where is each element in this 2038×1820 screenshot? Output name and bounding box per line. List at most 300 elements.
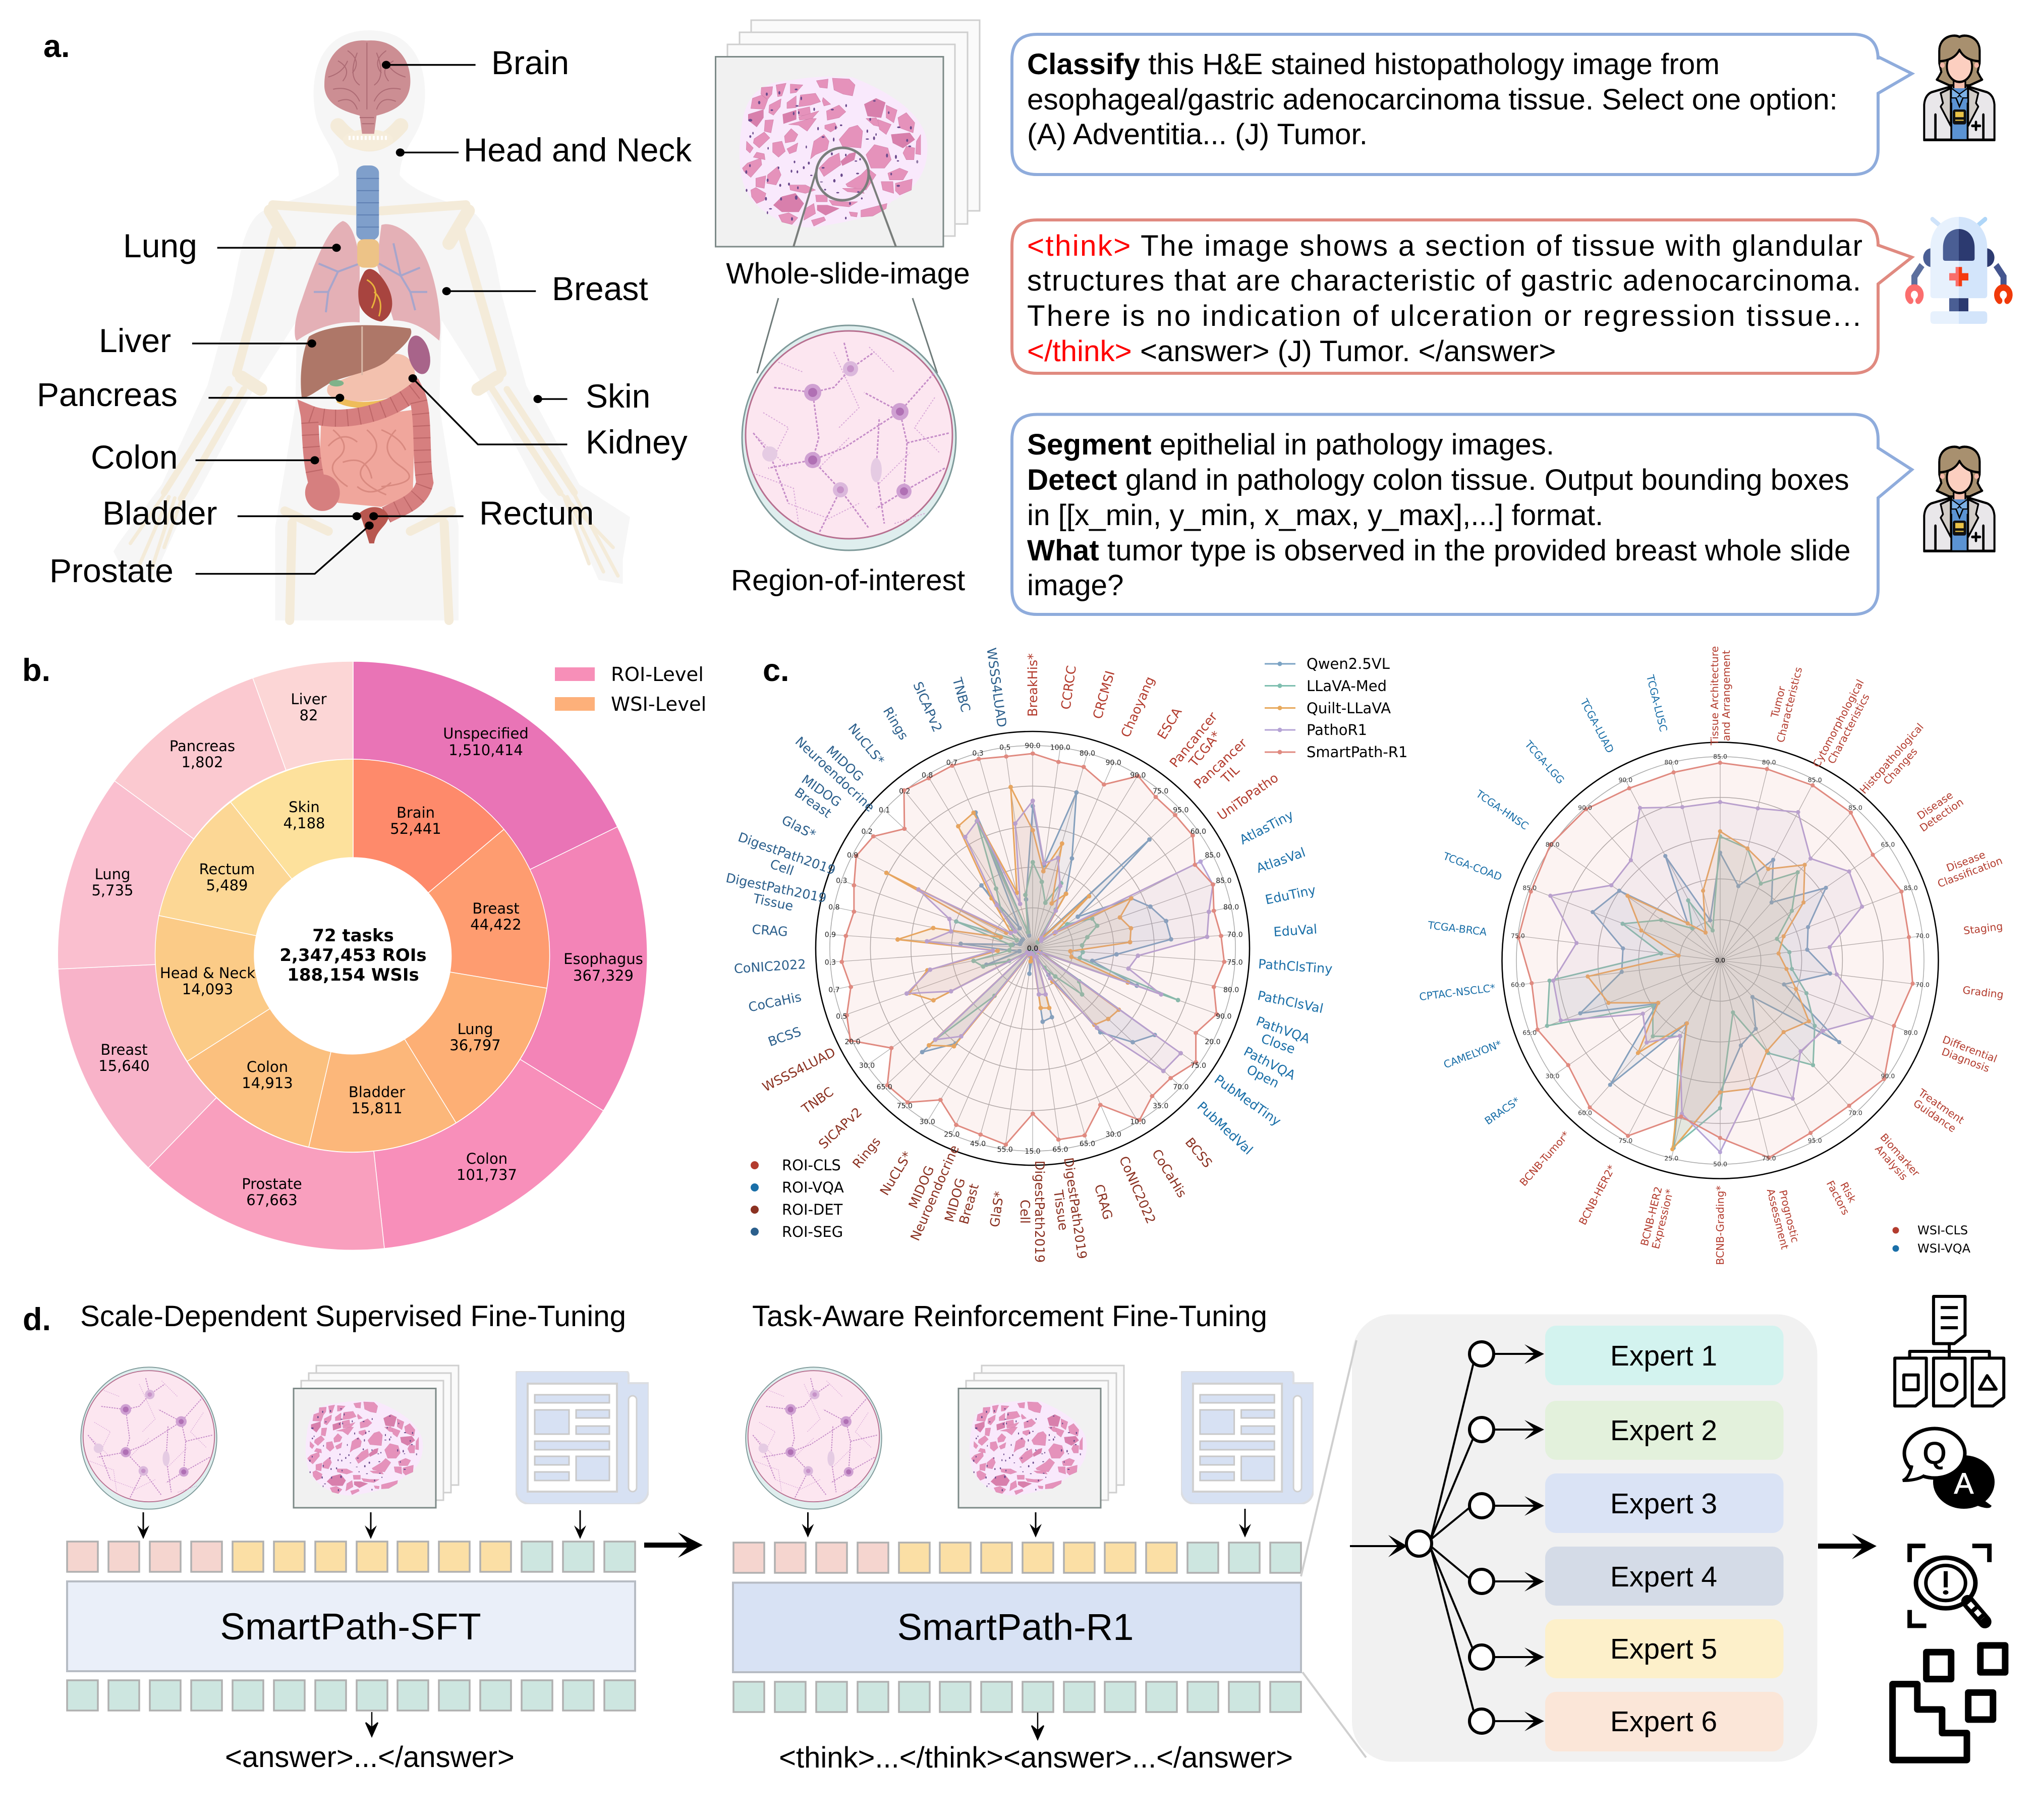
- sunburst labels: 15,811: [351, 1100, 403, 1117]
- radial tick values: 70.0: [1227, 931, 1243, 939]
- sunburst labels: Colon: [466, 1150, 507, 1167]
- speech bubble: user segmentation, detection and subtyping prompts: in [[x_min, y_min, x_max, y_max],...] format.: [1027, 499, 1603, 532]
- series: inner models: [886, 787, 1213, 1071]
- radar axis labels: Tissue: [1050, 1188, 1071, 1231]
- sunburst labels: 15,640: [98, 1057, 150, 1074]
- model legend: Qwen2.5VL: [1307, 655, 1390, 672]
- model box: SmartPath-SFT: [67, 1581, 635, 1671]
- radial tick values: 90.0: [1130, 772, 1146, 780]
- radial tick values: [825, 742, 1243, 1156]
- organ labels: Brain: [491, 44, 569, 81]
- radar axis labels: CRCMSI: [1090, 669, 1118, 721]
- organ labels: Colon: [91, 438, 178, 476]
- radial tick values: 85.0: [1216, 877, 1231, 885]
- radar axis labels: Cytomorphological: [1810, 677, 1866, 769]
- radar axis labels: DigestPath2019: [736, 830, 837, 878]
- radar axis labels: BCNB-Grading*: [1714, 1185, 1726, 1265]
- stage 1 output tokens: [67, 1680, 635, 1711]
- radial tick values: 50.0: [1713, 1160, 1727, 1168]
- radar axis labels: TCGA-LUAD: [1578, 697, 1616, 755]
- icon: question and answer bubbles: A: [1954, 1467, 1974, 1500]
- organ labels: Pancreas: [37, 376, 178, 413]
- radial tick values: 15.0: [1025, 1148, 1041, 1156]
- sunburst labels: [91, 691, 643, 1209]
- radar axis labels: UniToPatho: [1215, 770, 1281, 824]
- organ labels: Bladder: [102, 494, 217, 532]
- radial tick values: 0.7: [946, 759, 957, 767]
- sunburst labels: 1,510,414: [448, 742, 523, 759]
- radar axis labels: TNBC: [949, 675, 973, 714]
- radar axis labels: Characteristics: [1825, 692, 1872, 766]
- branch arrowheads: [1388, 1344, 1544, 1731]
- radar axis labels: CoNIC2022: [1116, 1154, 1158, 1226]
- WSI stack: [715, 20, 980, 247]
- expert 3: [1545, 1473, 1784, 1533]
- radial tick values: 85.0: [1808, 776, 1822, 783]
- sunburst labels: 367,329: [573, 967, 634, 984]
- human body illustration: [114, 30, 630, 620]
- radial tick values: 10.0: [1130, 1118, 1146, 1126]
- radar axis labels: BRACS*: [1483, 1095, 1522, 1127]
- arrow: stage 1 to stage 2: [644, 1532, 703, 1558]
- sunburst labels: 82: [300, 707, 318, 724]
- sunburst labels: 14,093: [182, 981, 233, 998]
- sunburst labels: Brain: [397, 804, 435, 821]
- center totals: 188,154 WSIs: [287, 965, 419, 985]
- radar axis labels: Diagnosis: [1940, 1046, 1991, 1074]
- radar axis labels: Neuroendocrine: [908, 1143, 963, 1243]
- radial tick values: 90.0: [1025, 742, 1041, 750]
- radar axis labels: CoCaHis: [1149, 1147, 1190, 1201]
- radar axis labels: WSSS4LUAD: [760, 1045, 838, 1095]
- stage 2 output text: <think>...</think><answer>...</answer>: [779, 1741, 1293, 1774]
- legend: [555, 663, 706, 716]
- organ labels: Breast: [552, 270, 648, 307]
- radar axis labels: MIDOG: [799, 772, 844, 810]
- sunburst labels: Pancreas: [169, 737, 235, 755]
- radar axis labels: MIDOG: [823, 743, 866, 785]
- radial tick values: 0.0: [1027, 945, 1038, 953]
- speech bubble: model reasoning response: structures that are characteristic of gastric adenocarcinoma.: [1027, 264, 1861, 297]
- organ labels: Kidney: [586, 423, 688, 461]
- radar axis labels: PathClsVal: [1256, 988, 1325, 1016]
- radial tick values: 70.0: [1173, 1083, 1188, 1091]
- radar axis labels: CPTAC-NSCLC*: [1419, 982, 1496, 1003]
- radial tick values: 80.0: [1080, 750, 1095, 758]
- radar axis labels: AtlasTiny: [1237, 808, 1296, 848]
- radar axis labels: Classification: [1936, 855, 2004, 890]
- speech bubble: user segmentation, detection and subtyping prompts: Detect gland in pathology colon tissue. Output bounding boxes: [1027, 464, 1849, 496]
- radar axis labels: Staging: [1963, 920, 2004, 937]
- radar axis labels: Chaoyang: [1118, 674, 1158, 740]
- radar axis labels: DigestPath2019: [724, 871, 828, 906]
- radar axis labels: EduTiny: [1264, 883, 1317, 908]
- model box: SmartPath-SFT: SmartPath-SFT: [220, 1606, 481, 1647]
- arrow: experts to task outputs: [1818, 1533, 1877, 1559]
- sunburst labels: Esophagus: [563, 950, 643, 968]
- sunburst labels: Breast: [100, 1041, 148, 1058]
- radial tick values: 85.0: [1205, 851, 1221, 860]
- radial tick values: 30.0: [1106, 1131, 1121, 1139]
- radial tick values: 30.0: [1546, 1072, 1559, 1080]
- radial tick values: 90.0: [1106, 759, 1121, 767]
- ROI task legend: ROI-VQA: [782, 1179, 844, 1196]
- radial tick values: 0.5: [836, 1013, 847, 1021]
- WSI task legend: WSI-CLS: [1917, 1223, 1968, 1237]
- radar axis labels: Risk: [1838, 1180, 1858, 1205]
- organ labels: Prostate: [49, 552, 174, 589]
- zoom lines to ROI: [757, 298, 937, 373]
- speech bubble: user classification prompt: esophageal/gastric adenocarcinoma tissue. Select one option:: [1027, 83, 1838, 116]
- sunburst labels: Bladder: [349, 1084, 405, 1101]
- radar axis labels: TCGA-LGG: [1522, 738, 1567, 786]
- stage 2 output arrow: [1032, 1713, 1044, 1739]
- model legend: PathoR1: [1307, 721, 1367, 738]
- stage 1 input arrows: [143, 1510, 580, 1533]
- document icon: [516, 1371, 649, 1504]
- radar axis labels: BCNB-Tumor*: [1517, 1129, 1572, 1188]
- radar axis labels: [1419, 646, 2004, 1265]
- radial tick values: 90.0: [1618, 776, 1632, 783]
- heading: supervised fine-tuning: Scale-Dependent Supervised Fine-Tuning: [80, 1300, 626, 1333]
- radial tick values: 30.0: [859, 1062, 875, 1070]
- document icon: [1181, 1371, 1314, 1504]
- radial tick values: 45.0: [970, 1140, 986, 1148]
- sunburst labels: Prostate: [242, 1175, 302, 1192]
- model box: SmartPath-R1: [733, 1583, 1301, 1672]
- radar axis labels: Characteristics: [1774, 666, 1804, 744]
- radar axis labels: [721, 647, 1333, 1263]
- speech bubble: model reasoning response: </think> <answer> (J) Tumor. </answer>: [1027, 335, 1556, 368]
- radar axis labels: CRAG: [752, 922, 788, 940]
- radial tick values: 95.0: [1173, 807, 1188, 815]
- radar axis labels: BCSS: [1182, 1135, 1215, 1171]
- radar axis labels: EduVal: [1273, 922, 1318, 940]
- speech bubble: user classification prompt: [1012, 34, 1912, 175]
- outer ring: ROI-level: [58, 661, 647, 1250]
- speech bubble: model reasoning response: There is no indication of ulceration or regression tissue...: [1027, 300, 1861, 332]
- organ labels: Lung: [123, 227, 197, 264]
- radar axis labels: Open: [1244, 1062, 1281, 1091]
- radar axis labels: Rings: [880, 705, 911, 743]
- sunburst labels: Lung: [458, 1020, 493, 1038]
- sunburst labels: 4,188: [283, 815, 325, 832]
- inner ring: WSI-level: [155, 759, 549, 1152]
- radar axis labels: TCGA-LUSC: [1644, 673, 1670, 733]
- sunburst labels: Lung: [95, 866, 130, 883]
- ROI task legend: ROI-SEG: [782, 1223, 843, 1240]
- sunburst labels: Head & Neck: [160, 964, 255, 982]
- radial tick values: 75.0: [1153, 787, 1168, 795]
- radar axis labels: Tissue Architecture: [1709, 646, 1721, 746]
- radar axis labels: Analysis: [1873, 1143, 1910, 1182]
- radar axis labels: Breast: [791, 785, 834, 821]
- radar axis labels: Neuroendocrine: [792, 734, 877, 815]
- radar axis labels: Close: [1259, 1031, 1297, 1057]
- radar axis labels: DigestPath2019: [1032, 1161, 1047, 1263]
- radial tick values: 30.0: [920, 1118, 935, 1126]
- radial tick values: 0.5: [999, 744, 1010, 752]
- stage 2 arrowheads: [802, 1524, 1251, 1538]
- radar axis labels: NuCLS*: [877, 1149, 915, 1198]
- WSI task legend: [1893, 1223, 1971, 1256]
- radial tick values: 0.3: [972, 750, 984, 758]
- center totals: 2,347,453 ROIs: [279, 945, 427, 965]
- radar axis labels: Cell: [768, 857, 796, 879]
- stage 1 input tokens: [67, 1542, 635, 1572]
- radial tick values: 80.0: [1664, 759, 1678, 766]
- organ labels: Rectum: [479, 494, 594, 532]
- radar axis labels: BreakHis*: [1026, 653, 1041, 717]
- radar axis labels: CAMELYON*: [1442, 1038, 1503, 1071]
- radar axis labels: TCGA-HNSC: [1474, 787, 1531, 832]
- radar axis labels: AtlasVal: [1254, 845, 1308, 876]
- radar axis labels: PathClsTiny: [1258, 957, 1333, 977]
- expert 2: [1545, 1401, 1784, 1460]
- radar axis labels: Histopathological: [1857, 721, 1926, 796]
- radial tick values: 75.0: [1762, 1154, 1776, 1162]
- radar axis labels: Treatment: [1916, 1086, 1966, 1126]
- model box: SmartPath-R1: SmartPath-R1: [897, 1606, 1134, 1648]
- callout leader lines: [192, 61, 567, 574]
- ROI image: [81, 1367, 217, 1509]
- speech bubble: user segmentation, detection and subtyping prompts: [1012, 415, 1912, 614]
- radial tick values: 80.0: [1904, 1029, 1918, 1036]
- sunburst labels: 14,913: [242, 1074, 293, 1092]
- model legend: LLaVA-Med: [1307, 677, 1387, 695]
- center totals: 72 tasks: [312, 926, 394, 946]
- radial tick values: 60.0: [1191, 828, 1206, 836]
- panel label a: a.: [43, 29, 70, 64]
- sunburst labels: Rectum: [199, 861, 255, 878]
- radar axis labels: Guidance: [1911, 1097, 1958, 1135]
- WSI stack: [958, 1366, 1124, 1508]
- stage 1 output text: <answer>...</answer>: [225, 1741, 515, 1774]
- icon: doctor 1: [1924, 36, 1995, 140]
- sunburst labels: Breast: [472, 900, 520, 917]
- radial tick values: 0.7: [828, 986, 840, 994]
- radial tick values: 70.0: [1915, 981, 1930, 989]
- radial tick values: 65.0: [1522, 1029, 1537, 1036]
- radar axis labels: ESCA: [1155, 705, 1185, 742]
- radar axis labels: Cell: [1017, 1200, 1032, 1224]
- radial tick values: 0.9: [825, 931, 836, 939]
- stage 1 arrowheads: [137, 1525, 586, 1539]
- ROI task legend: [751, 1157, 844, 1240]
- radar axis labels: Assessment: [1765, 1187, 1791, 1250]
- expert 4: [1545, 1547, 1784, 1606]
- expert 1: [1545, 1326, 1784, 1385]
- radar axis labels: TCGA*: [1186, 728, 1224, 770]
- icon: segmentation masks: [1893, 1645, 2005, 1760]
- expert routing panel: [1301, 1315, 1817, 1761]
- radial tick values: 75.0: [897, 1102, 913, 1110]
- radial tick values: 0.2: [861, 828, 873, 836]
- radar axis labels: CRAG: [1091, 1183, 1115, 1221]
- radial tick values: 65.0: [1881, 840, 1895, 848]
- radar axis labels: Disease: [1945, 848, 1987, 874]
- radial tick values: 0.3: [825, 958, 836, 966]
- sunburst labels: 52,441: [390, 820, 441, 837]
- radar axis labels: GlaS*: [987, 1190, 1007, 1228]
- radial tick values: 90.0: [1578, 804, 1592, 812]
- radial tick values: 0.2: [899, 787, 910, 795]
- radial tick values: 85.0: [1713, 753, 1727, 760]
- radial tick values: 90.0: [1216, 1013, 1231, 1021]
- sunburst labels: 36,797: [449, 1037, 501, 1054]
- stage 2 input tokens: [733, 1543, 1301, 1573]
- icon: doctor 2: [1924, 447, 1995, 551]
- radial tick values: 0.0: [1715, 956, 1725, 964]
- icon: detection magnifier: [1910, 1546, 1990, 1626]
- expert 1: Expert 1: [1610, 1340, 1717, 1372]
- ROI dish: [742, 325, 956, 550]
- sunburst labels: 1,802: [181, 754, 223, 771]
- radar grid: [816, 731, 1250, 1165]
- radial tick values: 25.0: [1664, 1154, 1678, 1162]
- radial tick values: [1511, 753, 1930, 1168]
- radial tick values: 80.0: [1223, 903, 1239, 912]
- radar axis labels: Pancancer: [1167, 709, 1221, 771]
- radar axis labels: DigestPath2019: [1060, 1157, 1090, 1260]
- model legend: SmartPath-R1: [1307, 744, 1407, 761]
- radar axis labels: Differential: [1941, 1033, 1999, 1065]
- radial tick values: 80.0: [1223, 986, 1239, 994]
- radar grid: [1502, 743, 1938, 1178]
- sunburst labels: 5,735: [91, 882, 134, 899]
- radial tick values: 0.1: [879, 807, 890, 815]
- radar axis labels: TNBC: [799, 1085, 836, 1117]
- radial tick values: 65.0: [877, 1083, 892, 1091]
- radial tick values: 70.0: [1848, 1109, 1862, 1116]
- radar axis labels: BCSS: [766, 1024, 803, 1050]
- legend: WSI-Level: [611, 693, 706, 716]
- radial tick values: 60.0: [1578, 1109, 1592, 1116]
- radial tick values: 95.0: [1808, 1137, 1822, 1145]
- panel label c: c.: [763, 653, 789, 688]
- expert 4: Expert 4: [1610, 1561, 1717, 1593]
- stage 2 input arrows: [808, 1509, 1245, 1532]
- radar axis labels: WSSS4LUAD: [983, 647, 1009, 728]
- organ labels: Liver: [99, 322, 171, 359]
- radial tick values: 0.8: [922, 772, 933, 780]
- radar axis labels: PathVQA: [1254, 1014, 1312, 1047]
- heading: reinforcement fine-tuning: Task-Aware Reinforcement Fine-Tuning: [752, 1300, 1267, 1333]
- radial tick values: 75.0: [1191, 1062, 1206, 1070]
- expert 2: Expert 2: [1610, 1414, 1717, 1447]
- stage 1 output arrow: [366, 1712, 378, 1736]
- radar axis labels: TCGA-BRCA: [1427, 919, 1488, 938]
- series: SmartPath-R1: [842, 754, 1224, 1145]
- radar axis labels: Tissue: [751, 891, 795, 914]
- radar axis labels: PubMedVal: [1194, 1099, 1256, 1158]
- speech bubble: model reasoning response: [1012, 220, 1912, 373]
- radial tick values: 0.3: [836, 877, 847, 885]
- legend: ROI-Level: [611, 663, 704, 686]
- radial tick values: 85.0: [1522, 884, 1537, 892]
- WSI task legend: WSI-VQA: [1917, 1241, 1971, 1256]
- radial tick values: 90.0: [1881, 1072, 1895, 1080]
- WSI caption: Whole-slide-image: [726, 257, 970, 290]
- radial tick values: 20.0: [1205, 1038, 1221, 1046]
- radar axis labels: Rings: [850, 1134, 884, 1171]
- expert 6: Expert 6: [1610, 1705, 1717, 1738]
- radial tick values: 100.0: [1050, 744, 1070, 752]
- radial tick values: 75.0: [1511, 932, 1525, 939]
- radar axis labels: TIL: [1218, 762, 1243, 787]
- icon: question and answer bubbles: Q: [1923, 1436, 1946, 1470]
- sunburst labels: Liver: [291, 691, 327, 708]
- radial tick values: 70.0: [1915, 932, 1930, 939]
- radial tick values: 80.0: [1546, 840, 1559, 848]
- radar axis labels: Changes: [1881, 746, 1920, 787]
- panel d: training pipeline: [23, 1296, 2005, 1774]
- radial tick values: 85.0: [1904, 884, 1918, 892]
- panel a: anatomy with organ callouts: [37, 29, 692, 620]
- ROI task legend: ROI-CLS: [782, 1157, 841, 1174]
- model legend: [1265, 655, 1407, 761]
- sunburst labels: 44,422: [470, 916, 522, 933]
- stage 1 inputs: [81, 1366, 649, 1509]
- panel label d: d.: [23, 1302, 51, 1337]
- expert 6: [1545, 1692, 1784, 1751]
- organ labels: Skin: [586, 377, 650, 415]
- speech bubble: user segmentation, detection and subtyping prompts: Segment epithelial in pathology images.: [1027, 428, 1554, 461]
- radar chart: WSI-level tasks: [1419, 646, 2004, 1265]
- radar axis labels: Disease: [1915, 789, 1955, 822]
- radial tick values: 55.0: [997, 1146, 1013, 1154]
- series: all models: [1518, 763, 1913, 1158]
- router edges: [1350, 1342, 1536, 1733]
- radar axis labels: MIDOG: [942, 1176, 969, 1224]
- radar axis labels: MIDOG: [906, 1164, 938, 1211]
- radar axis labels: Breast: [956, 1182, 982, 1226]
- radar axis labels: Biomarker: [1878, 1131, 1922, 1179]
- radar axis labels: NuCLS*: [845, 721, 887, 768]
- expert 5: [1545, 1619, 1784, 1678]
- ROI task legend: ROI-DET: [782, 1201, 843, 1218]
- speech bubble: model reasoning response: <think> The image shows a section of tissue with glandular: [1027, 230, 1862, 262]
- radar axis labels: Expression*: [1650, 1188, 1676, 1250]
- icon: robot: [1908, 217, 2010, 324]
- sunburst labels: Unspecified: [443, 725, 529, 742]
- speech bubble: user segmentation, detection and subtyping prompts: image?: [1027, 569, 1124, 602]
- radial tick values: 0.8: [828, 903, 840, 912]
- radar axis labels: PathVQA: [1241, 1044, 1298, 1084]
- radial tick values: 65.0: [1080, 1140, 1095, 1148]
- radial tick values: 25.0: [944, 1131, 959, 1139]
- radial tick values: 20.0: [844, 1038, 861, 1046]
- whole-slide image stack and region of interest: [715, 20, 980, 597]
- radial tick values: 60.0: [1511, 981, 1525, 989]
- stage 2 inputs: [746, 1366, 1314, 1509]
- icon: question and answer bubbles: [1903, 1429, 1995, 1509]
- radar axis labels: GlaS*: [779, 813, 818, 842]
- radar axis labels: SICAPv2: [816, 1105, 865, 1152]
- radar axis labels: BCNB-HER2: [1638, 1185, 1665, 1247]
- radar axis labels: CoNIC2022: [733, 957, 806, 977]
- radar axis labels: TCGA-COAD: [1441, 850, 1504, 883]
- panel label b: b.: [22, 653, 50, 688]
- center totals: [279, 926, 427, 985]
- radar axis labels: Tumor: [1769, 685, 1788, 719]
- expert 5: Expert 5: [1610, 1633, 1717, 1665]
- radar axis labels: CoCaHis: [747, 990, 803, 1015]
- WSI stack: [294, 1366, 459, 1508]
- sunburst labels: Colon: [247, 1058, 288, 1075]
- radar axis labels: Factors: [1824, 1178, 1852, 1217]
- speech bubble: user classification prompt: Classify this H&E stained histopathology image from: [1027, 48, 1720, 81]
